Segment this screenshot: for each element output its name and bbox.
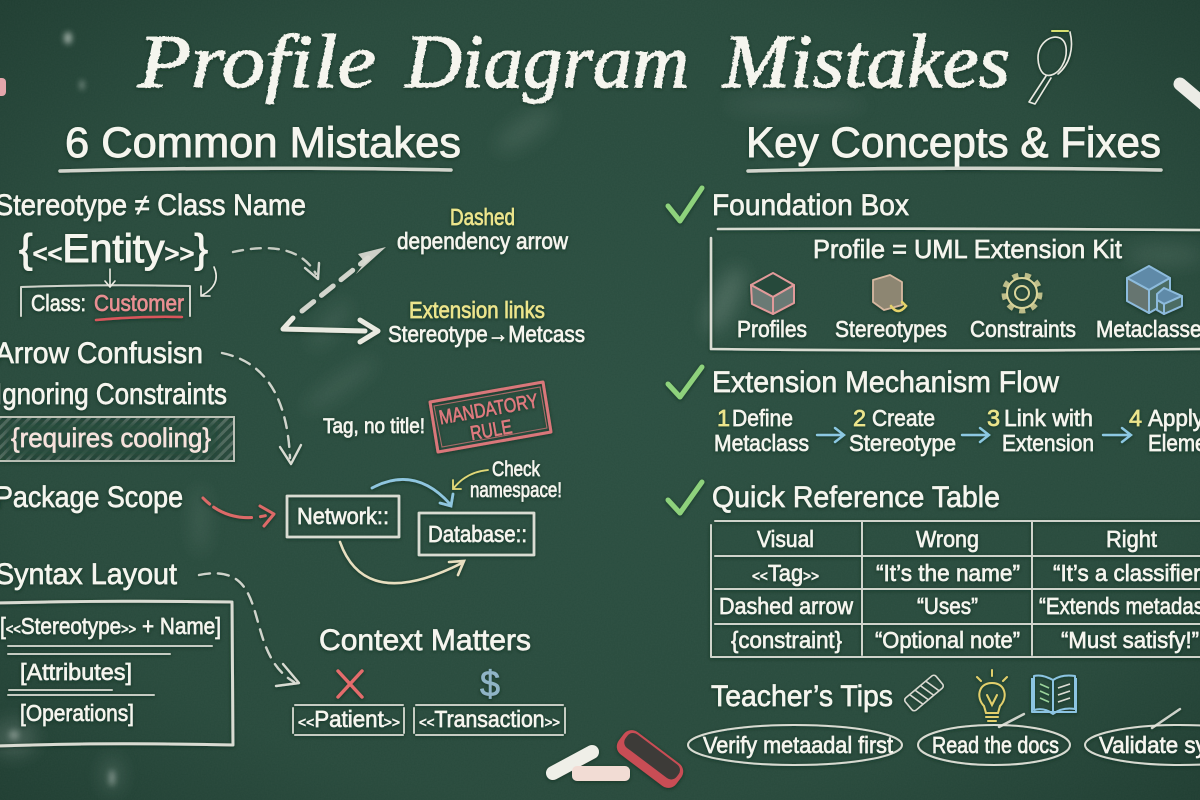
mistake 4: package scope: Package Scope — [0, 481, 183, 514]
mistake 1: stereotype vs class name: Stereotype ≠ Class Name — [0, 189, 306, 222]
dashed arrow to context matters — [199, 573, 299, 686]
section: extension mechanism flow: Extension Mechanism Flow — [712, 366, 1059, 399]
mistake 1: stereotype vs class name — [0, 189, 306, 320]
step 3 — [987, 405, 1094, 456]
class box layout: [Operations] — [20, 700, 134, 726]
step 2: Create — [872, 405, 935, 431]
blue arrow — [372, 479, 453, 506]
context matters — [293, 624, 565, 735]
package: Network: Network:: — [297, 503, 389, 529]
icon: check — [668, 188, 702, 221]
section: teacher's tips — [688, 670, 1200, 765]
namespace note: namespace! — [470, 479, 562, 502]
icon: light bulb — [977, 670, 1007, 721]
tip: validate syntax — [1085, 709, 1200, 765]
mistake 1: stereotype vs class name: Class: — [31, 290, 86, 316]
package diagram — [287, 458, 562, 583]
table text: “Uses” — [917, 593, 978, 619]
red arrow to network package — [203, 498, 274, 526]
namespace note: Check — [492, 458, 540, 481]
step 1: Define — [732, 405, 793, 431]
section: extension mechanism flow — [668, 366, 1200, 456]
icon: profiles cube — [751, 273, 794, 314]
section: foundation box — [668, 188, 1200, 350]
step 2: 2 — [853, 405, 866, 431]
step 1: Metaclass — [714, 430, 809, 456]
dashed dependency arrow: Dashed — [450, 204, 515, 230]
step 3: Link with — [1004, 405, 1093, 431]
dashed dependency arrow — [302, 204, 569, 311]
step 4: 4 — [1129, 405, 1142, 431]
table text — [719, 526, 1200, 653]
icon: metaclasses cubes — [1127, 266, 1182, 314]
table text: <<Tag>> — [752, 560, 819, 586]
icon: magnifier sketch — [1029, 31, 1072, 104]
title: Diagram — [404, 20, 689, 104]
tag: patient: <<Patient>> — [298, 706, 400, 732]
step 3: 3 — [987, 405, 1000, 431]
tip: verify metaclass — [688, 725, 902, 765]
callout: mandatory rule stamp — [323, 382, 551, 452]
cream arrow — [340, 542, 464, 583]
icon: red cross — [338, 671, 362, 697]
callout: mandatory rule stamp: RULE — [469, 416, 514, 445]
icon: check — [668, 367, 702, 397]
table text: “Optional note” — [875, 627, 1020, 653]
dashed curved arrow — [233, 248, 319, 279]
step 1 — [714, 405, 809, 456]
mistake 2: arrow confusion: Arrow Confusisn — [0, 337, 203, 370]
chalk and eraser — [553, 726, 687, 792]
icon: book — [1032, 676, 1076, 714]
icon: chalk stick — [904, 674, 944, 712]
package: Database — [419, 513, 534, 555]
heading: 6 Common Mistakes: 6 Common Mistakes — [65, 119, 461, 167]
table text: “It’s the name” — [876, 560, 1020, 586]
class box layout — [0, 601, 233, 746]
step 1: 1 — [717, 405, 730, 431]
icon: check — [668, 482, 702, 513]
arrow — [962, 428, 989, 442]
section: quick reference table — [668, 481, 1200, 657]
table text: {constraint} — [731, 627, 842, 653]
tip: verify metaclass: Verify metaadal first — [703, 732, 893, 758]
class box layout: [Attributes] — [20, 659, 132, 685]
callout: mandatory rule stamp: Tag, no title! — [323, 415, 425, 438]
mistake 5: syntax layout: Syntax Layout — [0, 558, 178, 591]
table text: Dashed arrow — [719, 593, 854, 619]
table text: Wrong — [916, 526, 979, 552]
icon labels — [737, 316, 1200, 342]
mistake 1: stereotype vs class name: Customer — [94, 290, 184, 316]
icon labels: Profiles — [737, 316, 807, 342]
section: foundation box: Foundation Box — [712, 189, 909, 222]
heading: Key Concepts & Fixes: Key Concepts & Fixes — [746, 119, 1161, 167]
title: Profile — [137, 20, 376, 104]
step 4 — [1129, 405, 1200, 456]
icon: stereotypes block — [873, 275, 906, 311]
chalk stick, right edge — [1180, 84, 1200, 106]
icon: dollar: $ — [480, 663, 500, 704]
extension link arrow: Extension links — [409, 297, 545, 323]
tag: transaction: <<Transaction>> — [419, 706, 560, 732]
mistake 3: ignoring constraints — [0, 378, 234, 461]
table text: Right — [1106, 526, 1157, 552]
package: Network — [287, 496, 399, 537]
dashed dependency arrow: dependency arrow — [397, 228, 569, 254]
icon: gear — [1004, 275, 1040, 311]
step 2: Stereotype — [849, 430, 956, 456]
tip: read the docs — [918, 714, 1070, 765]
icon labels: Constraints — [970, 316, 1076, 342]
context matters: Context Matters — [319, 624, 531, 657]
title — [137, 20, 1010, 104]
class box layout: [<<Stereotype>> + Name] — [0, 613, 221, 639]
package: Database: Database:: — [428, 521, 527, 547]
step 3: Extension — [1002, 430, 1094, 456]
mistake 1: stereotype vs class name: {<<Entity>>} — [19, 227, 208, 271]
title: Mistakes — [722, 20, 1010, 104]
mistake 3: ignoring constraints: {requires cooling} — [11, 423, 211, 453]
extension link arrow — [283, 297, 585, 347]
namespace note — [453, 458, 562, 502]
tip: read the docs: Read the docs — [932, 732, 1059, 758]
section: foundation box: Profile = UML Extension Kit — [813, 234, 1123, 264]
table text: Visual — [757, 526, 814, 552]
icon labels: Stereotypes — [835, 316, 947, 342]
chalk stub, left edge — [0, 78, 6, 96]
section: teacher's tips: Teacher’s Tips — [711, 680, 893, 713]
arrow — [817, 428, 844, 442]
section: quick reference table: Quick Reference Table — [712, 481, 1000, 514]
callout: mandatory rule stamp: MANDATORY — [437, 390, 540, 429]
dashed arrow to package diagram — [222, 353, 301, 464]
step 2 — [849, 405, 956, 456]
extension link arrow: Stereotype→Metcass — [388, 321, 585, 347]
arrow — [1103, 428, 1131, 442]
mistake 3: ignoring constraints: Ignoring Constraints — [0, 378, 227, 411]
